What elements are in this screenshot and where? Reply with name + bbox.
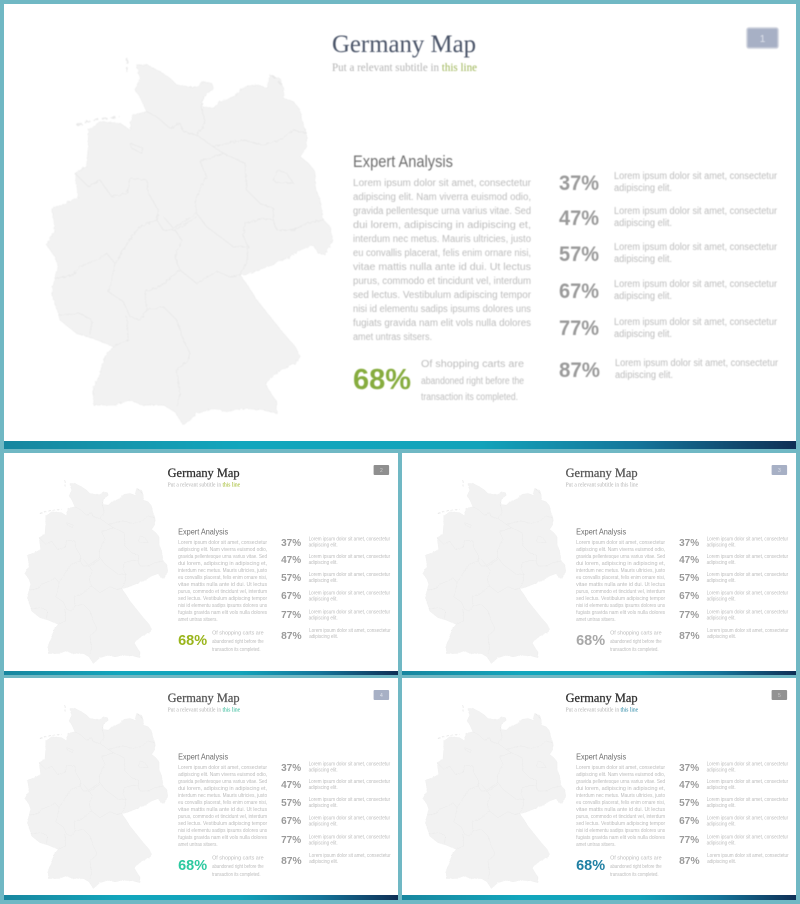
- panel: small slide bottom left: [4, 678, 398, 900]
- title: Germany Map: [332, 31, 476, 58]
- body paragraph: vitae mattis nulla ante id dui. Ut lectus: [576, 807, 666, 813]
- statistics list: adipiscing elit.: [614, 329, 672, 340]
- body paragraph: Lorem ipsum dolor sit amet, consectetur: [178, 765, 267, 771]
- callout: 68%: transaction its completed.: [610, 872, 659, 878]
- body paragraph: [178, 540, 268, 623]
- callout: 68%: [576, 630, 662, 653]
- body paragraph: interdum nec metus. Mauris ultricies, justo: [353, 234, 531, 245]
- statistics list: Lorem ipsum dolor sit amet, consectetur: [707, 853, 789, 859]
- body paragraph: gravida pellentesque urna varius vitae. Sed: [353, 206, 531, 217]
- body paragraph: [178, 765, 268, 848]
- callout: 68%: [353, 359, 524, 403]
- body paragraph: gravida pellentesque urna varius vitae. Sed: [178, 779, 267, 785]
- callout: 68%: abandoned right before the: [212, 639, 264, 645]
- statistics list: Lorem ipsum dolor sit amet, consectetur: [707, 779, 788, 785]
- statistics list: 47%: [281, 554, 302, 566]
- body paragraph: purus, commodo et tincidunt vel, interdum: [178, 589, 267, 595]
- statistics list: Lorem ipsum dolor sit amet, consectetur: [309, 797, 390, 803]
- title: Germany Map: [566, 466, 638, 480]
- subtitle: Put a relevant subtitle in this line: [332, 62, 477, 74]
- callout: 68%: 68%: [178, 633, 207, 649]
- body paragraph: interdum nec metus. Mauris ultricies, justo: [178, 568, 267, 574]
- body paragraph: eu convallis placerat, felis enim ornare nisi,: [576, 575, 665, 581]
- statistics list: [679, 536, 789, 642]
- panel: small slide bottom right: [402, 678, 796, 900]
- statistics list: Lorem ipsum dolor sit amet, consectetur: [707, 797, 788, 803]
- statistics list: 57%: [281, 572, 302, 584]
- subtitle: Put a relevant subtitle in this line: [168, 708, 241, 714]
- body paragraph: fugiats gravida nam elit vols nulla dolores: [576, 610, 666, 616]
- page badge: [772, 465, 787, 475]
- statistics list: Lorem ipsum dolor sit amet, consectetur: [614, 317, 778, 328]
- statistics list: adipiscing elit.: [707, 578, 736, 584]
- page badge: [772, 690, 787, 700]
- body paragraph: Lorem ipsum dolor sit amet, consectetur: [576, 540, 665, 546]
- statistics list: adipiscing elit.: [309, 840, 338, 846]
- statistics list: 57%: [679, 797, 700, 809]
- body paragraph: sed lectus. Vestibulum adipiscing tempor: [178, 596, 267, 602]
- statistics list: adipiscing elit.: [309, 596, 338, 602]
- body paragraph: Lorem ipsum dolor sit amet, consectetur: [178, 540, 267, 546]
- body paragraph: fugiats gravida nam elit vols nulla dolores: [178, 610, 268, 616]
- body paragraph: amet untras sitsers.: [178, 617, 218, 623]
- body paragraph: gravida pellentesque urna varius vitae. Sed: [576, 779, 665, 785]
- body paragraph: eu convallis placerat, felis enim ornare nisi,: [576, 800, 665, 806]
- statistics list: 87%: [679, 855, 700, 867]
- statistics list: adipiscing elit.: [309, 768, 338, 774]
- statistics list: Lorem ipsum dolor sit amet, consectetur: [707, 554, 788, 560]
- statistics list: Lorem ipsum dolor sit amet, consectetur: [309, 628, 391, 634]
- map of Germany: [423, 705, 566, 888]
- body paragraph: [353, 178, 532, 343]
- statistics list: adipiscing elit.: [707, 822, 736, 828]
- statistics list: 67%: [281, 815, 302, 827]
- statistics list: adipiscing elit.: [309, 785, 338, 791]
- statistics list: 87%: [281, 855, 302, 867]
- statistics list: adipiscing elit.: [707, 542, 736, 548]
- statistics list: adipiscing elit.: [614, 218, 672, 229]
- statistics list: [559, 171, 779, 382]
- callout: 68%: transaction its completed.: [421, 392, 518, 403]
- panel: small slide top left: [4, 453, 398, 675]
- statistics list: 67%: [679, 815, 700, 827]
- statistics list: 67%: [281, 590, 302, 602]
- statistics list: 47%: [679, 779, 700, 791]
- body paragraph: amet untras sitsers.: [576, 842, 616, 848]
- body paragraph: interdum nec metus. Mauris ultricies, justo: [576, 793, 665, 799]
- statistics list: adipiscing elit.: [309, 616, 338, 622]
- heading: Expert Analysis: Expert Analysis: [178, 752, 228, 762]
- statistics list: adipiscing elit.: [707, 803, 736, 809]
- heading: Expert Analysis: Expert Analysis: [353, 153, 453, 171]
- page badge: 1: [760, 34, 766, 45]
- callout: 68%: abandoned right before the: [212, 864, 264, 870]
- statistics list: 37%: [281, 537, 302, 549]
- statistics list: 57%: [559, 243, 599, 266]
- body paragraph: nisi id elementu sadips ipsums dolores uns: [178, 828, 268, 834]
- body paragraph: [576, 540, 666, 623]
- body paragraph: purus, commodo et tincidunt vel, interdum: [576, 589, 665, 595]
- body paragraph: interdum nec metus. Mauris ultricies, justo: [178, 793, 267, 799]
- callout: 68%: 68%: [576, 858, 605, 874]
- page badge: [374, 690, 389, 700]
- body paragraph: vitae mattis nulla ante id dui. Ut lectus: [178, 582, 268, 588]
- statistics list: 77%: [679, 609, 700, 621]
- statistics list: adipiscing elit.: [615, 370, 673, 381]
- page badge: 4: [380, 693, 383, 699]
- heading: Expert Analysis: Expert Analysis: [178, 528, 228, 536]
- body paragraph: purus, commodo et tincidunt vel, interdum: [178, 814, 267, 820]
- body paragraph: amet untras sitsers.: [353, 332, 432, 343]
- statistics list: 57%: [679, 572, 700, 584]
- heading: Expert Analysis: Expert Analysis: [576, 528, 626, 536]
- statistics list: Lorem ipsum dolor sit amet, consectetur: [309, 779, 390, 785]
- statistics list: adipiscing elit.: [309, 822, 338, 828]
- body paragraph: nisi id elementu sadips ipsums dolores uns: [576, 828, 666, 834]
- callout: 68%: Of shopping carts are: [610, 856, 662, 862]
- statistics list: Lorem ipsum dolor sit amet, consectetur: [707, 816, 788, 822]
- body paragraph: vitae mattis nulla ante id dui. Ut lectus: [576, 582, 666, 588]
- body paragraph: dui lorem, adipiscing in adipiscing et,: [576, 786, 665, 792]
- callout: 68%: [178, 856, 264, 878]
- panel: small slide top right: [402, 453, 796, 675]
- statistics list: Lorem ipsum dolor sit amet, consectetur: [614, 171, 778, 182]
- statistics list: adipiscing elit.: [309, 859, 338, 865]
- statistics list: Lorem ipsum dolor sit amet, consectetur: [707, 762, 788, 768]
- statistics list: Lorem ipsum dolor sit amet, consectetur: [309, 554, 390, 560]
- map of Germany: [25, 480, 168, 663]
- statistics list: Lorem ipsum dolor sit amet, consectetur: [309, 572, 390, 578]
- statistics list: [281, 762, 391, 867]
- statistics list: 67%: [559, 280, 599, 303]
- body paragraph: sed lectus. Vestibulum adipiscing tempor: [576, 596, 665, 602]
- statistics list: adipiscing elit.: [309, 578, 338, 584]
- body paragraph: fugiats gravida nam elit vols nulla dolores: [353, 318, 531, 329]
- statistics list: 77%: [281, 834, 302, 846]
- statistics list: Lorem ipsum dolor sit amet, consectetur: [707, 834, 788, 840]
- body paragraph: eu convallis placerat, felis enim ornare nisi,: [353, 248, 531, 259]
- statistics list: adipiscing elit.: [309, 634, 338, 640]
- body paragraph: interdum nec metus. Mauris ultricies, justo: [576, 568, 665, 574]
- statistics list: adipiscing elit.: [707, 560, 736, 566]
- callout: 68%: [576, 856, 662, 878]
- body paragraph: sed lectus. Vestibulum adipiscing tempor: [178, 821, 267, 827]
- statistics list: 37%: [559, 172, 599, 195]
- statistics list: adipiscing elit.: [707, 840, 736, 846]
- statistics list: Lorem ipsum dolor sit amet, consectetur: [707, 572, 788, 578]
- body paragraph: adipiscing elit. Nam viverra euismod odio,: [576, 547, 665, 553]
- subtitle: Put a relevant subtitle in this line: [566, 708, 639, 714]
- statistics list: Lorem ipsum dolor sit amet, consectetur: [707, 590, 788, 596]
- map of Germany: [47, 58, 332, 425]
- statistics list: 57%: [281, 797, 302, 809]
- callout: 68%: Of shopping carts are: [212, 630, 264, 636]
- body paragraph: gravida pellentesque urna varius vitae. Sed: [576, 554, 665, 560]
- statistics list: Lorem ipsum dolor sit amet, consectetur: [309, 610, 390, 616]
- heading: Expert Analysis: Expert Analysis: [576, 752, 626, 762]
- statistics list: Lorem ipsum dolor sit amet, consectetur: [309, 816, 390, 822]
- statistics list: Lorem ipsum dolor sit amet, consectetur: [309, 762, 390, 768]
- statistics list: Lorem ipsum dolor sit amet, consectetur: [614, 242, 778, 253]
- body paragraph: eu convallis placerat, felis enim ornare nisi,: [178, 800, 267, 806]
- body paragraph: dui lorem, adipiscing in adipiscing et,: [353, 220, 531, 231]
- statistics list: Lorem ipsum dolor sit amet, consectetur: [615, 358, 779, 369]
- body paragraph: amet untras sitsers.: [576, 617, 616, 623]
- body paragraph: [576, 765, 666, 848]
- statistics list: 87%: [679, 630, 700, 642]
- statistics list: adipiscing elit.: [309, 560, 338, 566]
- callout: 68%: abandoned right before the: [610, 864, 662, 870]
- page badge: [374, 465, 389, 475]
- statistics list: adipiscing elit.: [309, 803, 338, 809]
- gradient footer bar: [402, 895, 796, 900]
- body paragraph: vitae mattis nulla ante id dui. Ut lectus: [353, 262, 531, 273]
- body paragraph: dui lorem, adipiscing in adipiscing et,: [178, 561, 267, 567]
- callout: 68%: Of shopping carts are: [212, 856, 264, 862]
- statistics list: adipiscing elit.: [707, 596, 736, 602]
- body paragraph: nisi id elementu sadips ipsums dolores uns: [353, 304, 531, 315]
- title: Germany Map: [168, 466, 240, 480]
- statistics list: adipiscing elit.: [614, 254, 672, 265]
- callout: 68%: 68%: [353, 364, 411, 396]
- panel: main slide: [4, 4, 796, 449]
- statistics list: 47%: [281, 779, 302, 791]
- statistics list: [281, 536, 391, 642]
- map of Germany: [25, 705, 168, 888]
- body paragraph: adipiscing elit. Nam viverra euismod odio,: [576, 772, 665, 778]
- statistics list: adipiscing elit.: [707, 785, 736, 791]
- statistics list: 67%: [679, 590, 700, 602]
- statistics list: 47%: [679, 554, 700, 566]
- statistics list: Lorem ipsum dolor sit amet, consectetur: [614, 206, 778, 217]
- statistics list: adipiscing elit.: [614, 291, 672, 302]
- body paragraph: gravida pellentesque urna varius vitae. Sed: [178, 554, 267, 560]
- page badge: 5: [778, 693, 781, 699]
- page badge: [747, 28, 778, 48]
- page badge: 2: [380, 468, 383, 474]
- statistics list: 77%: [559, 317, 599, 340]
- statistics list: 87%: [281, 630, 302, 642]
- callout: 68%: abandoned right before the: [421, 376, 524, 387]
- callout: 68%: transaction its completed.: [212, 872, 261, 878]
- callout: 68%: abandoned right before the: [610, 639, 662, 645]
- statistics list: 77%: [679, 834, 700, 846]
- body paragraph: dui lorem, adipiscing in adipiscing et,: [178, 786, 267, 792]
- statistics list: 87%: [559, 359, 600, 382]
- callout: 68%: Of shopping carts are: [610, 630, 662, 636]
- body paragraph: eu convallis placerat, felis enim ornare nisi,: [178, 575, 267, 581]
- statistics list: adipiscing elit.: [614, 183, 672, 194]
- body paragraph: adipiscing elit. Nam viverra euismod odio,: [178, 772, 267, 778]
- body paragraph: Lorem ipsum dolor sit amet, consectetur: [353, 178, 532, 189]
- statistics list: Lorem ipsum dolor sit amet, consectetur: [309, 590, 390, 596]
- statistics list: 37%: [679, 762, 700, 774]
- callout: 68%: 68%: [576, 633, 605, 649]
- body paragraph: adipiscing elit. Nam viverra euismod odio,: [353, 192, 531, 203]
- gradient footer bar: [4, 671, 398, 675]
- callout: 68%: Of shopping carts are: [421, 359, 524, 370]
- title: Germany Map: [168, 691, 240, 705]
- callout: 68%: transaction its completed.: [610, 647, 659, 653]
- subtitle: Put a relevant subtitle in this line: [168, 482, 241, 488]
- map of Germany: [423, 480, 566, 663]
- body paragraph: sed lectus. Vestibulum adipiscing tempor: [576, 821, 665, 827]
- statistics list: [679, 762, 789, 867]
- body paragraph: purus, commodo et tincidunt vel, interdum: [353, 276, 531, 287]
- statistics list: Lorem ipsum dolor sit amet, consectetur: [309, 536, 390, 542]
- body paragraph: nisi id elementu sadips ipsums dolores uns: [178, 603, 268, 609]
- statistics list: 77%: [281, 609, 302, 621]
- body paragraph: fugiats gravida nam elit vols nulla dolores: [178, 835, 268, 841]
- statistics list: adipiscing elit.: [707, 616, 736, 622]
- statistics list: 47%: [559, 207, 599, 230]
- statistics list: adipiscing elit.: [707, 859, 736, 865]
- statistics list: 37%: [679, 537, 700, 549]
- body paragraph: sed lectus. Vestibulum adipiscing tempor: [353, 290, 532, 301]
- callout: 68%: transaction its completed.: [212, 647, 261, 653]
- statistics list: Lorem ipsum dolor sit amet, consectetur: [614, 279, 778, 290]
- statistics list: Lorem ipsum dolor sit amet, consectetur: [707, 628, 789, 634]
- body paragraph: fugiats gravida nam elit vols nulla dolores: [576, 835, 666, 841]
- body paragraph: purus, commodo et tincidunt vel, interdum: [576, 814, 665, 820]
- callout: 68%: 68%: [178, 858, 207, 874]
- statistics list: 37%: [281, 762, 302, 774]
- page badge: 3: [778, 468, 781, 474]
- body paragraph: nisi id elementu sadips ipsums dolores uns: [576, 603, 666, 609]
- title: Germany Map: [566, 691, 638, 705]
- statistics list: Lorem ipsum dolor sit amet, consectetur: [707, 536, 788, 542]
- statistics list: Lorem ipsum dolor sit amet, consectetur: [707, 610, 788, 616]
- statistics list: Lorem ipsum dolor sit amet, consectetur: [309, 853, 391, 859]
- statistics list: adipiscing elit.: [707, 634, 736, 640]
- body paragraph: vitae mattis nulla ante id dui. Ut lectus: [178, 807, 268, 813]
- body paragraph: adipiscing elit. Nam viverra euismod odio,: [178, 547, 267, 553]
- gradient footer bar: [4, 895, 398, 900]
- body paragraph: dui lorem, adipiscing in adipiscing et,: [576, 561, 665, 567]
- body paragraph: Lorem ipsum dolor sit amet, consectetur: [576, 765, 665, 771]
- gradient footer bar: [402, 671, 796, 675]
- body paragraph: amet untras sitsers.: [178, 842, 218, 848]
- subtitle: Put a relevant subtitle in this line: [566, 482, 639, 488]
- gradient footer bar: [4, 441, 796, 449]
- callout: 68%: [178, 630, 264, 653]
- statistics list: adipiscing elit.: [707, 768, 736, 774]
- statistics list: adipiscing elit.: [309, 542, 338, 548]
- statistics list: Lorem ipsum dolor sit amet, consectetur: [309, 834, 390, 840]
